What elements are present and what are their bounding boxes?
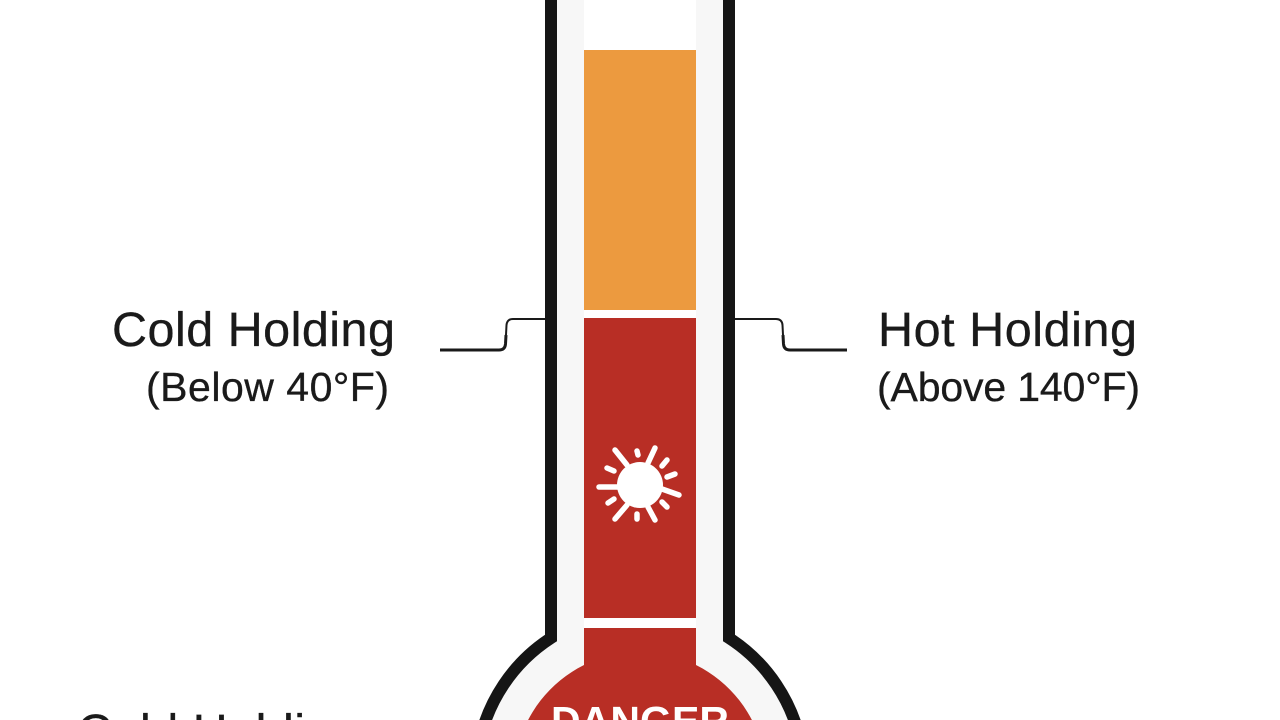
white gap lower xyxy=(584,618,696,628)
label: cold holding: Cold Holding xyxy=(112,303,395,357)
leader line: cold holding xyxy=(440,319,545,350)
thermometer outline xyxy=(476,0,804,720)
red bulb xyxy=(514,628,766,720)
label: cold holding: (Below 40°F) xyxy=(146,364,389,410)
icon: bacteria sun xyxy=(599,448,679,520)
thermometer xyxy=(476,0,804,720)
label: hot holding xyxy=(877,303,1140,410)
tube interior xyxy=(584,0,696,50)
label: hot holding: Hot Holding xyxy=(878,303,1137,357)
label: cold holding xyxy=(112,303,395,410)
white gap upper xyxy=(584,310,696,318)
label: hot holding: (Above 140°F) xyxy=(877,364,1140,410)
orange column xyxy=(584,50,696,310)
leader line: hot holding xyxy=(735,319,847,350)
red danger column xyxy=(584,318,696,618)
